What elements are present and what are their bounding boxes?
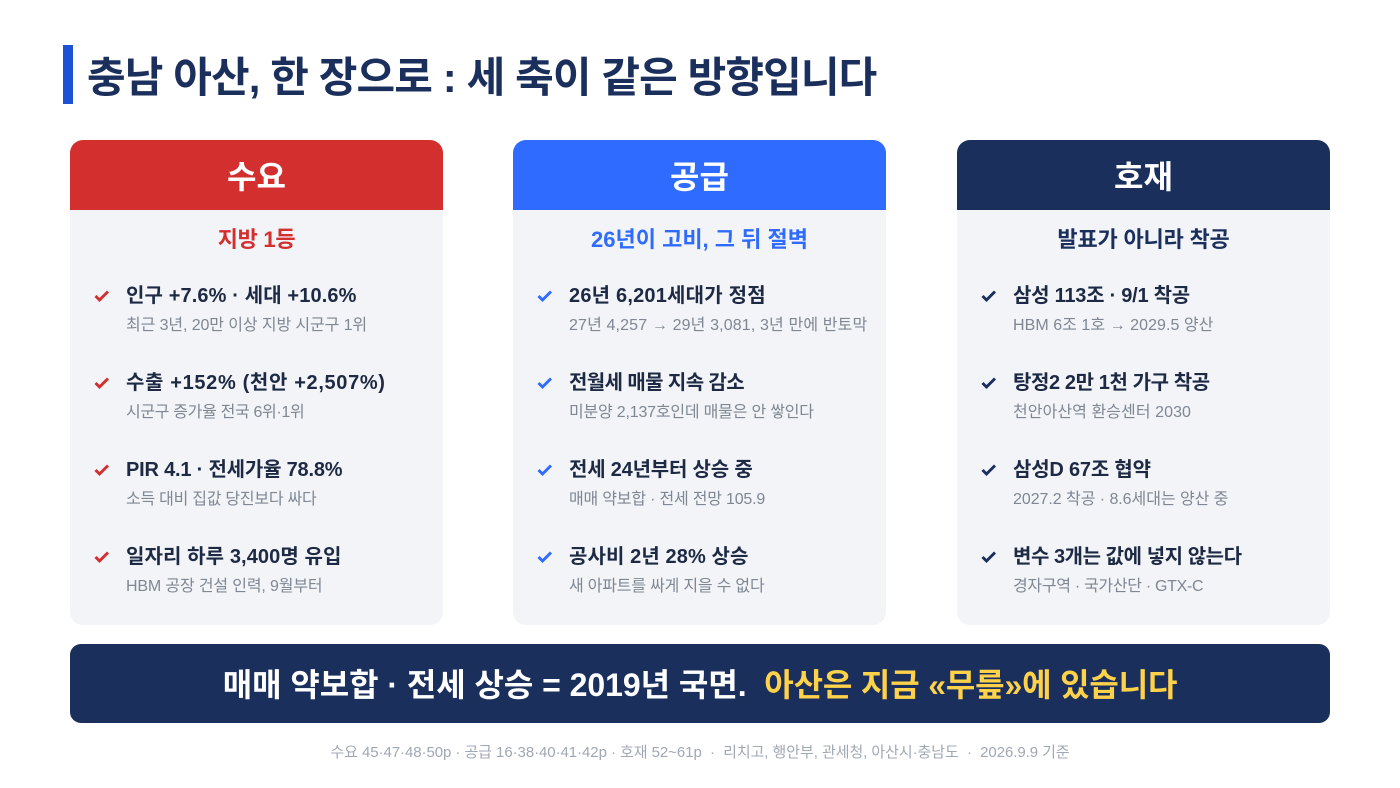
item: 변수: 경자구역 · 국가산단 · GTX-C bbox=[1013, 578, 1203, 595]
item: 삼성D: 삼성D 67조 협약 bbox=[1013, 459, 1151, 481]
item: 전월세 bbox=[538, 372, 814, 421]
item: 일자리 bbox=[94, 546, 342, 595]
heading: 공급 bbox=[513, 140, 886, 210]
item: PIR: 소득 대비 집값 당진보다 싸다 bbox=[126, 491, 316, 508]
item: 삼성 113조: HBM 6조 1호 → 2029.5 양산 bbox=[1013, 317, 1213, 334]
panel: 공급 bbox=[513, 140, 886, 625]
item: PIR bbox=[94, 459, 342, 508]
heading: 수요 bbox=[70, 140, 443, 210]
item: 공사비: 새 아파트를 싸게 지을 수 없다 bbox=[569, 578, 764, 595]
item: 26년: 27년 4,257 → 29년 3,081, 3년 만에 반토막 bbox=[569, 317, 867, 334]
heading: 호재 bbox=[957, 140, 1330, 210]
panel: 호재 bbox=[957, 140, 1330, 625]
item: 일자리: 일자리 하루 3,400명 유입 bbox=[126, 546, 342, 568]
item: 공사비: 공사비 2년 28% 상승 bbox=[569, 546, 749, 568]
panel: 수요 bbox=[70, 140, 443, 625]
item: 수출: 수출 +152% (천안 +2,507%) bbox=[126, 372, 386, 394]
item: 삼성 113조: 삼성 113조 · 9/1 착공 bbox=[1013, 285, 1190, 307]
subheading: 발표가 아니라 착공: 발표가 아니라 착공 bbox=[1057, 227, 1230, 252]
item: 26년: 26년 6,201세대가 정점 bbox=[569, 285, 766, 307]
item: 전세: 전세 24년부터 상승 중 bbox=[569, 459, 753, 481]
item: 전세 bbox=[538, 459, 765, 508]
item: 전세: 매매 약보합 · 전세 전망 105.9 bbox=[569, 491, 765, 508]
item: 삼성D: 2027.2 착공 · 8.6세대는 양산 중 bbox=[1013, 491, 1228, 508]
subheading: 지방 1등: 지방 1등 bbox=[218, 227, 295, 252]
item: 26년 bbox=[538, 285, 867, 334]
item: 탕정2: 탕정2 2만 1천 가구 착공 bbox=[1013, 372, 1210, 394]
heading: 호재: 호재 bbox=[1114, 159, 1173, 195]
item: 인구: 인구 +7.6% · 세대 +10.6% bbox=[126, 285, 357, 307]
item: 탕정2 bbox=[982, 372, 1210, 421]
item: 전월세: 전월세 매물 지속 감소 bbox=[569, 372, 744, 394]
item: 전월세: 미분양 2,137호인데 매물은 안 쌓인다 bbox=[569, 404, 814, 421]
item: 삼성D bbox=[982, 459, 1228, 508]
item: 인구 bbox=[94, 285, 367, 334]
title: 충남 아산, 한 장으로 : 세 축이 같은 방향입니다 bbox=[87, 54, 876, 101]
conclusion banner: 매매 약보합 · 전세 상승 = 2019년 국면. 아산은 지금 «무릎»에 있습니다 bbox=[223, 667, 1177, 703]
conclusion banner bbox=[70, 644, 1330, 723]
heading: 공급: 공급 bbox=[670, 159, 729, 195]
item: 변수: 변수 3개는 값에 넣지 않는다 bbox=[1013, 546, 1242, 568]
item: PIR: PIR 4.1 · 전세가율 78.8% bbox=[126, 459, 342, 481]
item: 수출: 시군구 증가율 전국 6위·1위 bbox=[126, 404, 304, 421]
item: 삼성 113조 bbox=[982, 285, 1213, 334]
item: 일자리: HBM 공장 건설 인력, 9월부터 bbox=[126, 578, 322, 595]
item: 탕정2: 천안아산역 환승센터 2030 bbox=[1013, 404, 1191, 421]
title accent bar bbox=[63, 45, 73, 104]
heading: 수요: 수요 bbox=[227, 159, 286, 195]
item: 변수 bbox=[982, 546, 1242, 595]
item: 공사비 bbox=[538, 546, 764, 595]
subheading: 26년이 고비: 26년이 고비, 그 뒤 절벽 bbox=[591, 227, 808, 252]
item: 수출 bbox=[94, 372, 386, 421]
source footnote: 수요 45·47·48·50p · 공급 16·38·40·41·42p · 호재 52~61p · 리치고, 행안부, 관세청, 아산시·충남도 · 2026.9.9 기준 bbox=[330, 744, 1070, 761]
item: 인구: 최근 3년, 20만 이상 지방 시군구 1위 bbox=[126, 317, 367, 334]
